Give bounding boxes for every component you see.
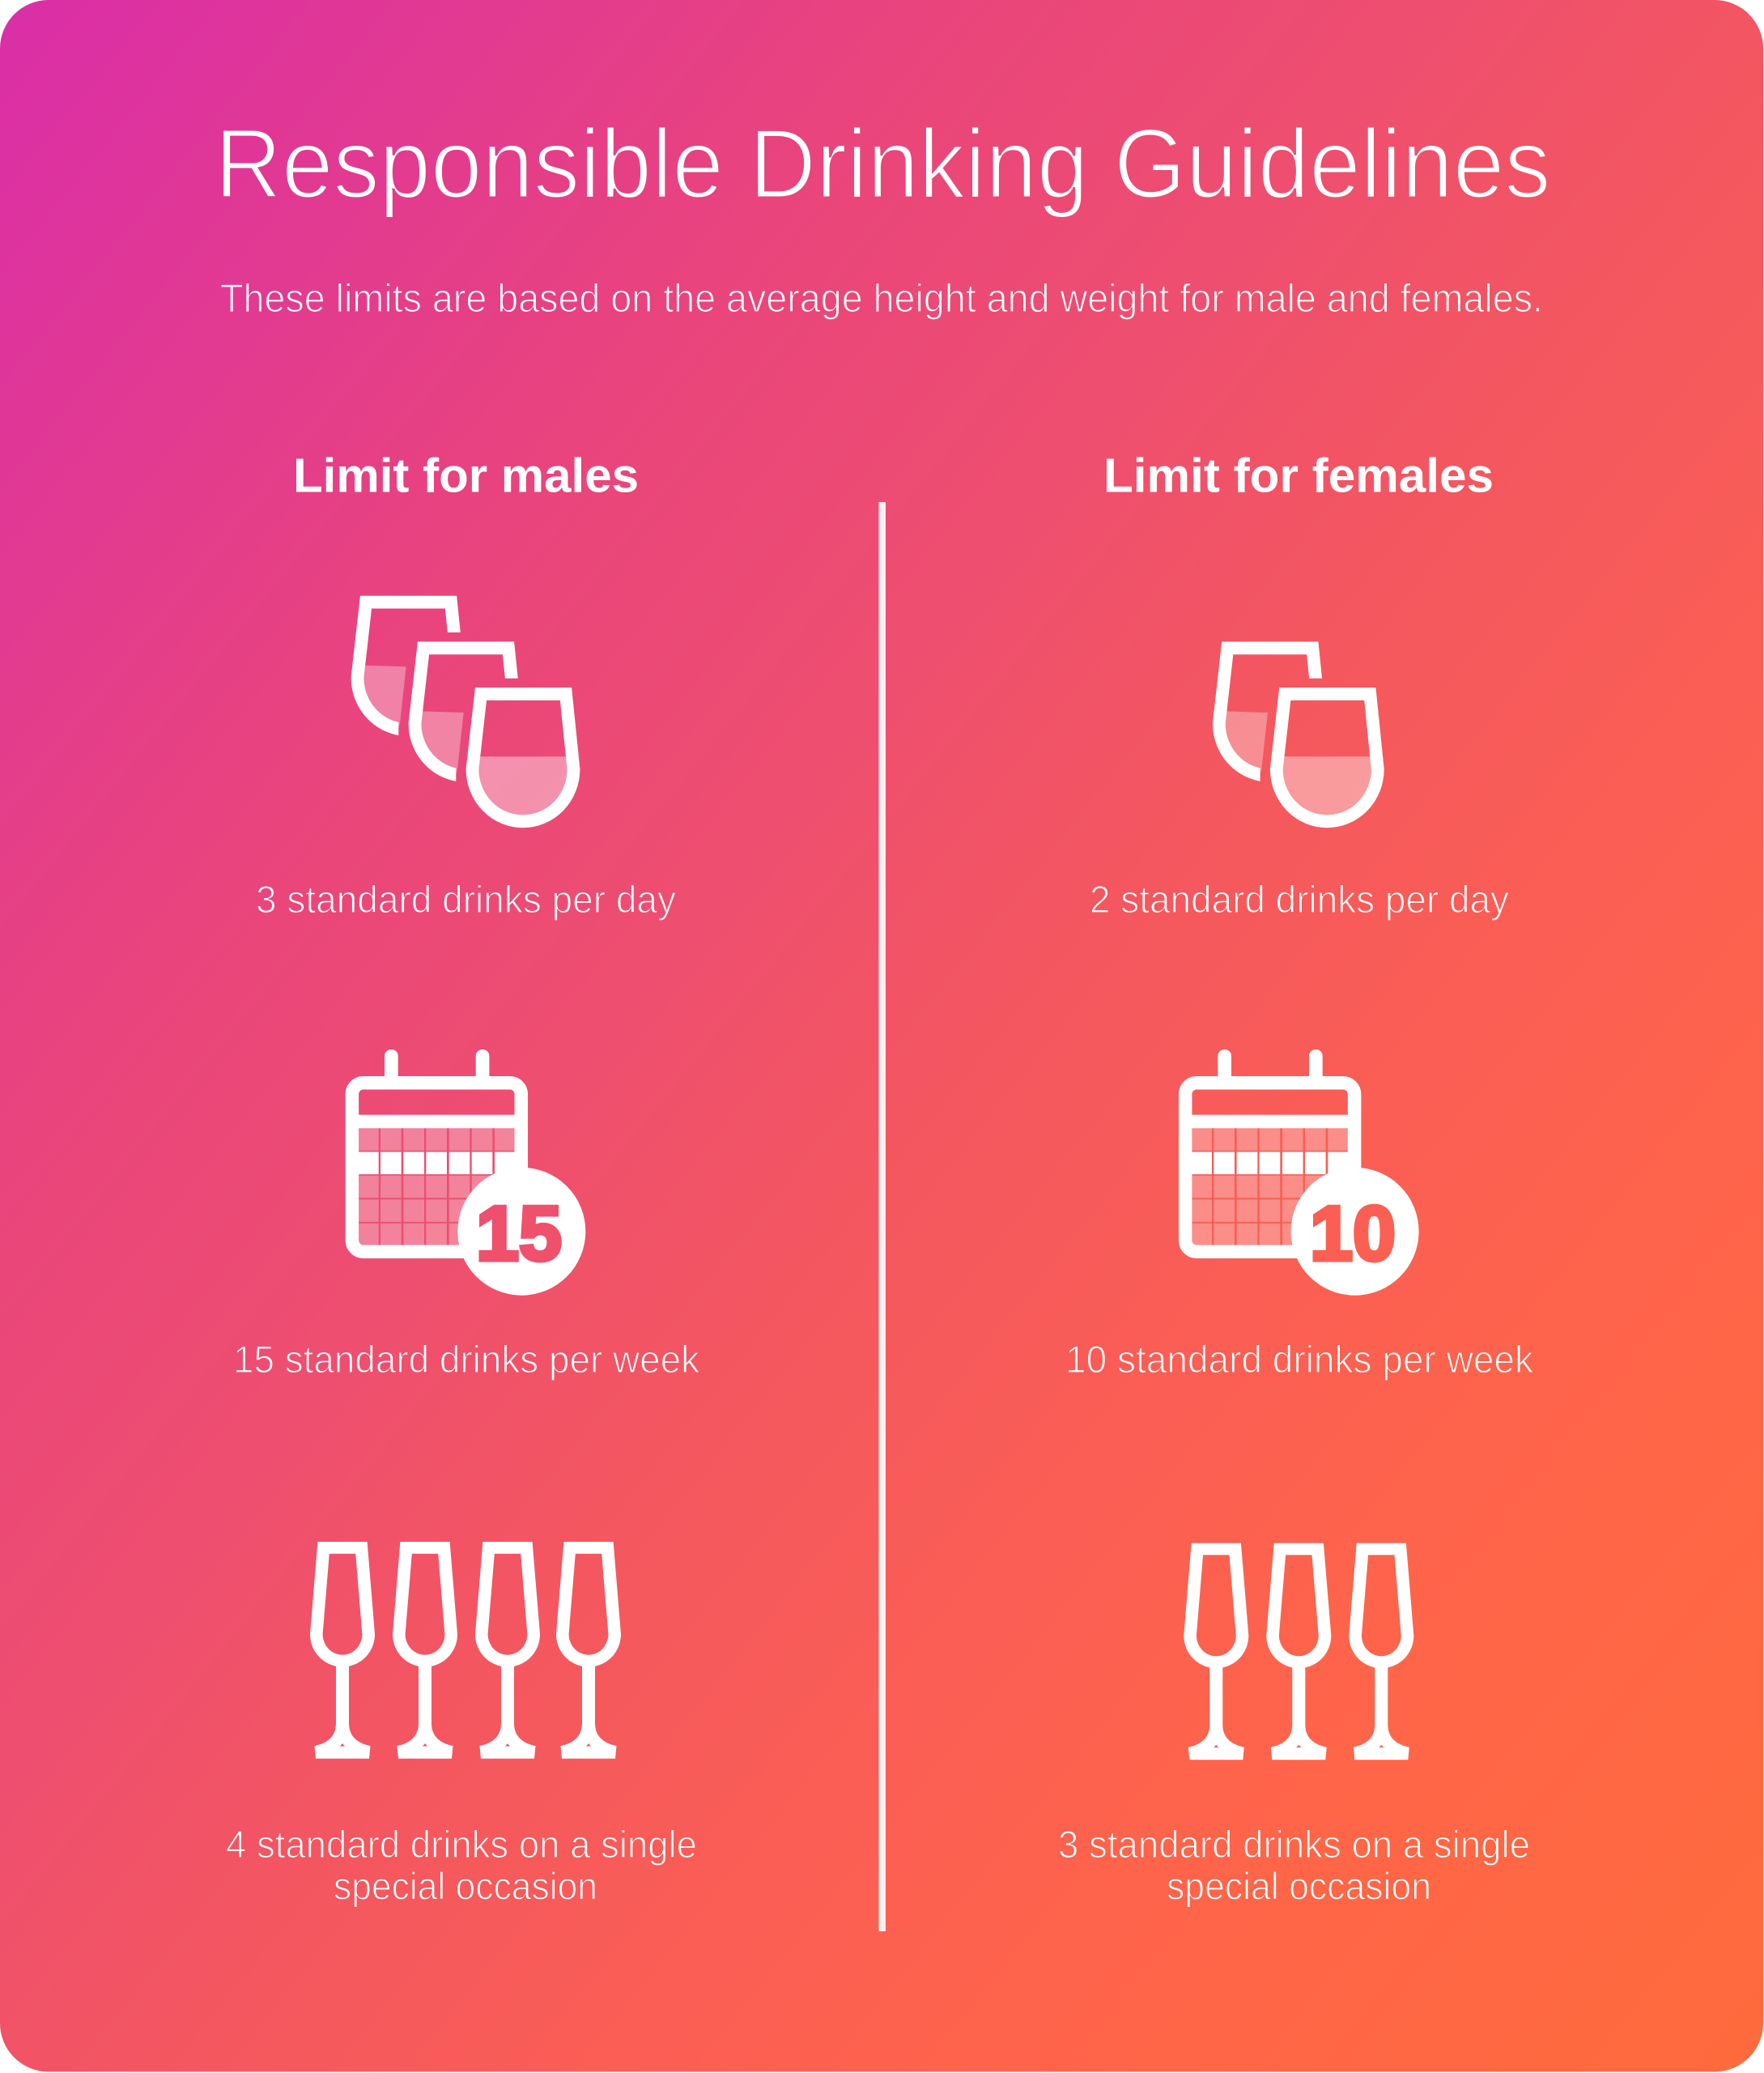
icon: calendar with 15 (male): 15 [476, 1190, 562, 1277]
heading: limit for females: Limit for females [1103, 449, 1494, 502]
icon: calendar with 10 (female): 10 [1310, 1190, 1396, 1277]
icon: three flutes (female) [1184, 1543, 1413, 1760]
label: 10 standard drinks per week: 10 standard drinks per week [1065, 1338, 1533, 1381]
icon: calendar with 15 (male) [352, 1049, 585, 1296]
label: 3 standard drinks on a single special occasion [1058, 1823, 1530, 1908]
icon: calendar with 10 (female) [1185, 1049, 1419, 1296]
icon: four flutes (male) [310, 1542, 621, 1759]
subtitle: These limits are based on the average height and weight for male and females. [220, 277, 1543, 321]
label: 2 standard drinks per day: 2 standard drinks per day [1090, 878, 1509, 921]
label: 3 standard drinks on a single special occasion: 3 standard drinks on a single [1058, 1823, 1530, 1866]
label: 15 standard drinks per week: 15 standard drinks per week [233, 1338, 699, 1381]
label: 3 standard drinks on a single special occasion: special occasion [1167, 1865, 1431, 1908]
label: 3 standard drinks per day: 3 standard drinks per day [256, 878, 676, 921]
title: Responsible Drinking Guidelines [215, 109, 1551, 219]
centre divider [879, 502, 886, 1931]
icon: two wine glasses (female) [1219, 648, 1378, 821]
heading: limit for males: Limit for males [293, 449, 639, 502]
label: 4 standard drinks on a single special occasion: 4 standard drinks on a single [226, 1823, 697, 1866]
label: 4 standard drinks on a single special occasion: special occasion [334, 1865, 597, 1908]
icon: three wine glasses (male) [357, 602, 573, 821]
label: 4 standard drinks on a single special occasion [226, 1823, 697, 1908]
